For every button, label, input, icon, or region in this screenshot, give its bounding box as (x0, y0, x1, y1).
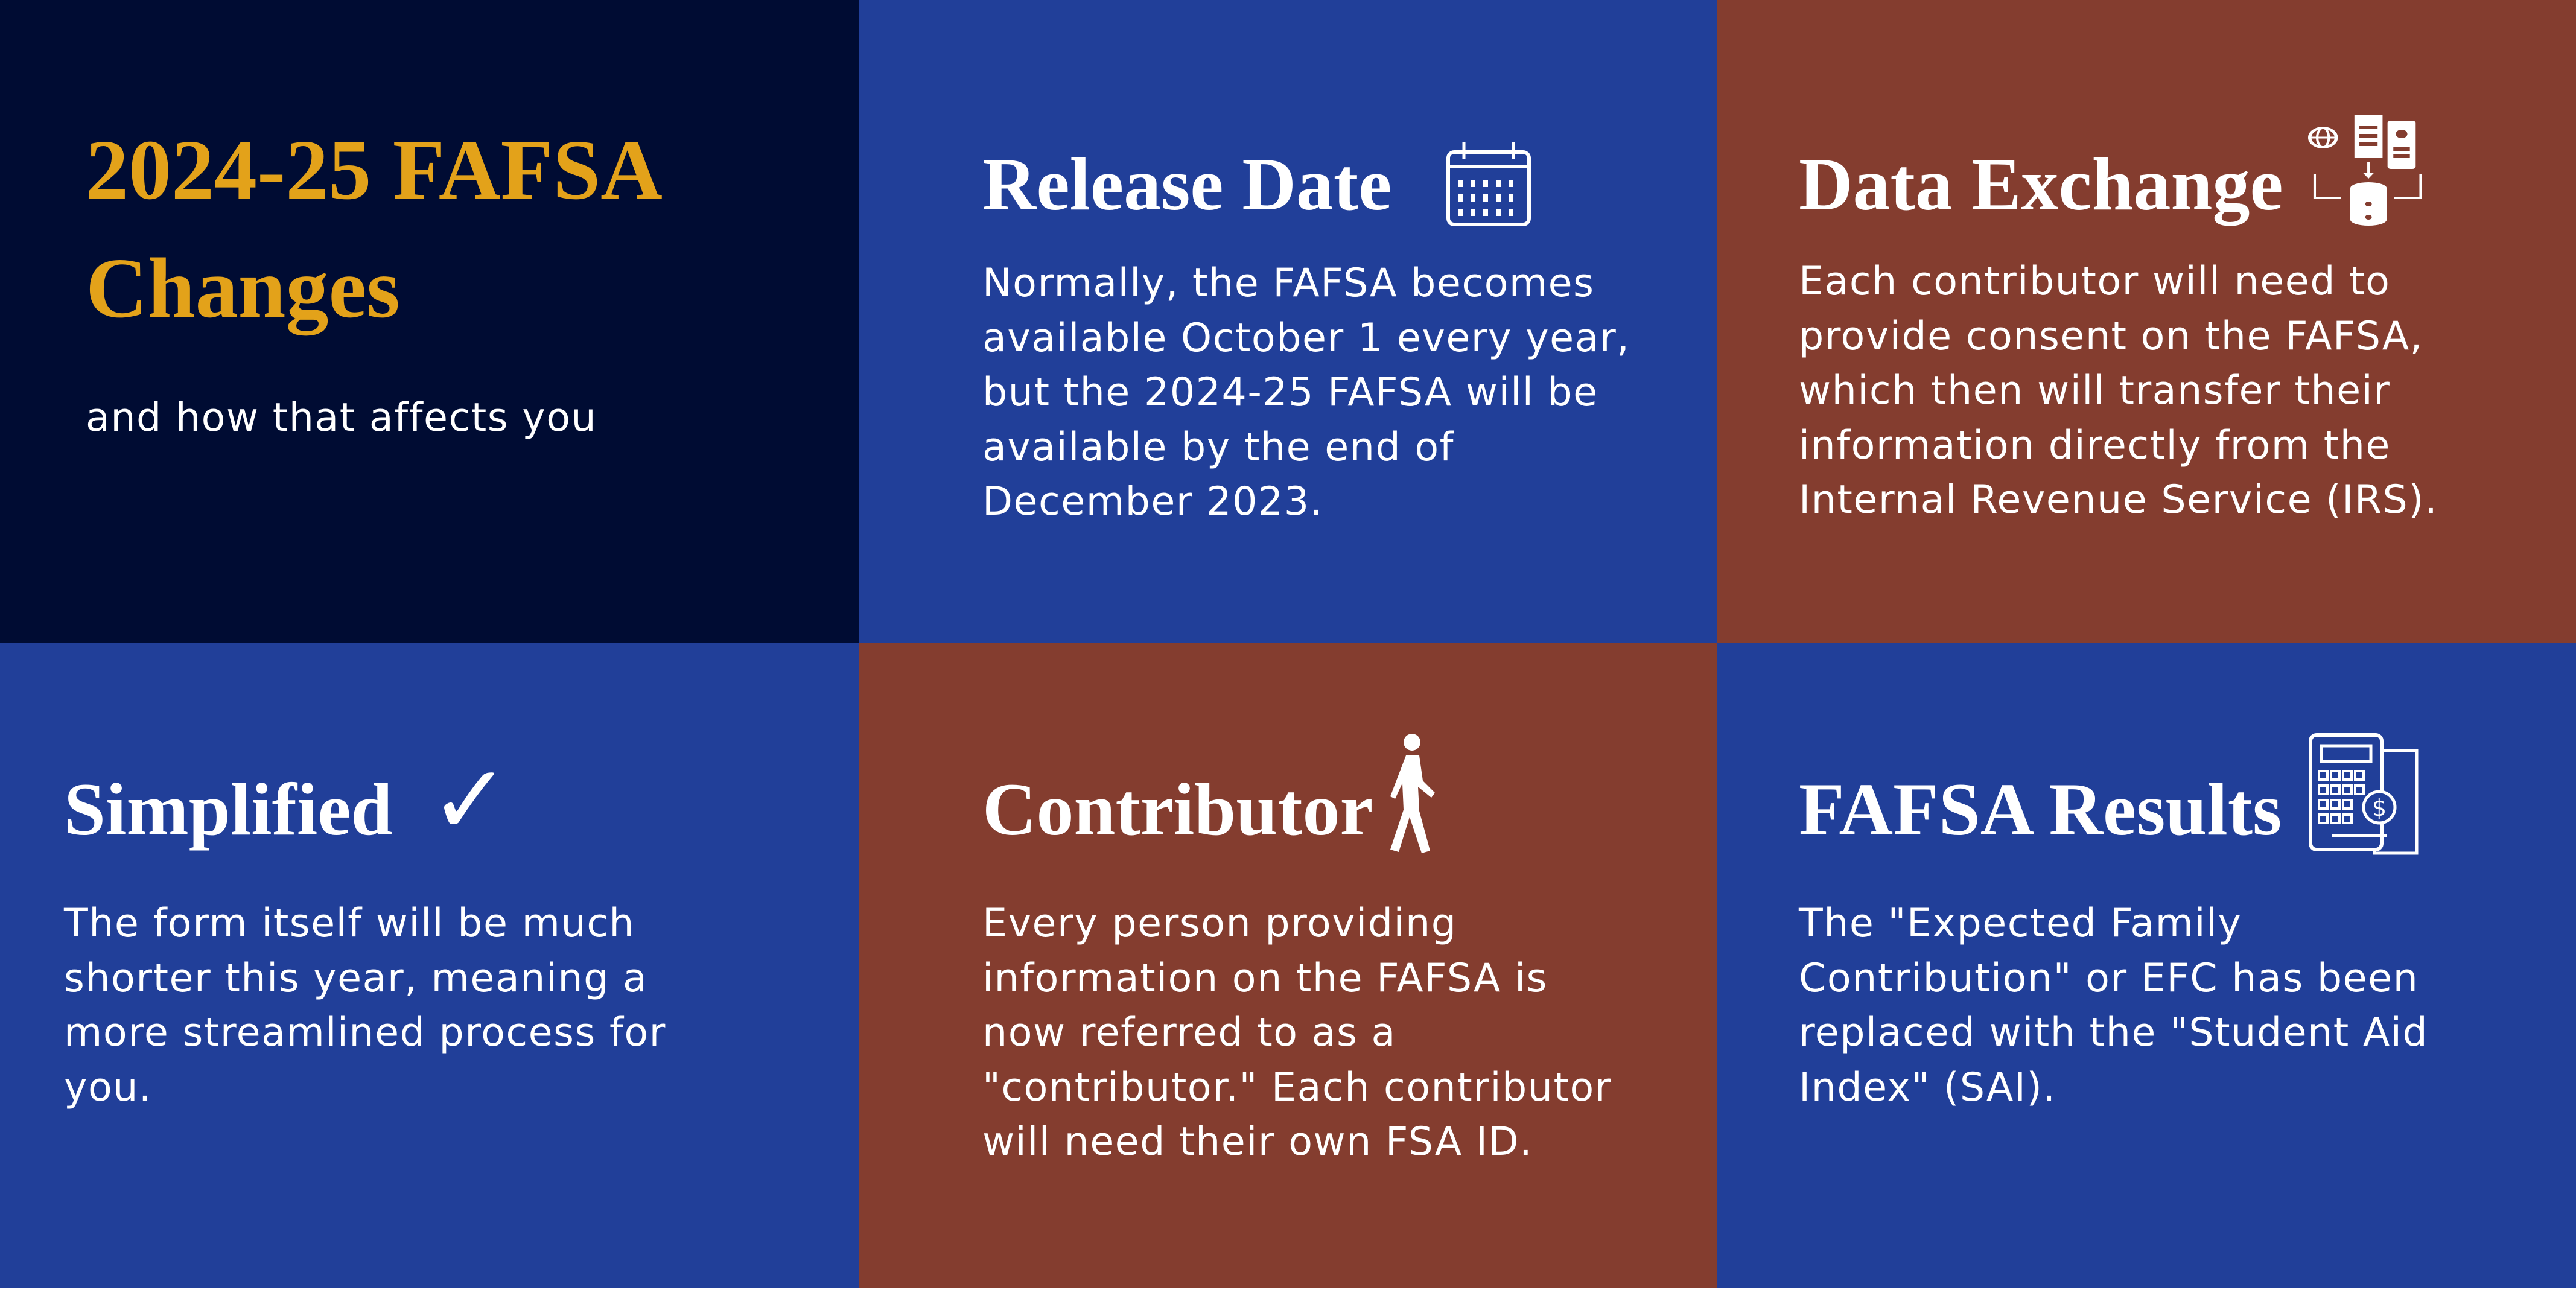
panel: title (0, 0, 859, 643)
text: release date: December 2023. (982, 479, 1323, 524)
icon: check: ✓ (430, 743, 510, 856)
panel: simplified (0, 643, 859, 1288)
text: data exchange: Each contributor will need to (1799, 259, 2390, 304)
text: contributor: "contributor." Each contributor (982, 1064, 1612, 1110)
text: data exchange: Internal Revenue Service (IRS). (1799, 477, 2438, 523)
icon: calculator (2309, 733, 2419, 854)
heading: fafsa results: FAFSA Results (1799, 768, 2282, 851)
text: fafsa results: replaced with the "Student Aid (1799, 1010, 2428, 1055)
text: contributor: now referred to as a (982, 1010, 1396, 1055)
text: fafsa results: Contribution" or EFC has been (1799, 956, 2419, 1000)
heading: contributor: Contributor (982, 768, 1373, 851)
title: 2024-25 FAFSA (86, 122, 663, 217)
text: fafsa results (1798, 901, 2428, 1110)
icon: data exchange (2308, 115, 2422, 226)
text: data exchange (1799, 259, 2438, 523)
text: simplified: The form itself will be much (64, 901, 635, 946)
text: release date: but the 2024-25 FAFSA will be (982, 370, 1598, 415)
text: release date (982, 261, 1630, 524)
subtitle: and how that affects you (86, 395, 597, 440)
icon: calculator: $ (2372, 795, 2387, 821)
text: contributor: information on the FAFSA is (982, 956, 1548, 1000)
text: fafsa results: Index" (SAI). (1799, 1064, 2056, 1110)
text: simplified (64, 901, 666, 1110)
panel: contributor (859, 643, 1717, 1288)
heading: release date: Release Date (982, 143, 1391, 226)
text: simplified: more streamlined process for (64, 1010, 666, 1055)
panel: release date (859, 0, 1717, 643)
icon: walking person (1390, 734, 1435, 853)
text: contributor: Every person providing (982, 901, 1457, 946)
panel: fafsa results (1717, 643, 2576, 1288)
text: data exchange: provide consent on the FAFSA, (1799, 314, 2423, 358)
panel: data exchange (1717, 0, 2576, 643)
heading: simplified: Simplified (64, 768, 392, 851)
text: fafsa results: The "Expected Family (1799, 901, 2242, 946)
text: release date: available October 1 every year, (982, 315, 1630, 361)
icon: calendar (1446, 142, 1531, 226)
text: data exchange: which then will transfer their (1799, 368, 2390, 413)
title: Changes (86, 240, 400, 335)
text: release date: available by the end of (982, 425, 1454, 469)
text: contributor: will need their own FSA ID. (982, 1119, 1533, 1164)
text: simplified: you. (64, 1064, 152, 1110)
text: data exchange: information directly from the (1799, 422, 2391, 468)
text: contributor (982, 901, 1612, 1164)
title (86, 122, 663, 335)
text: release date: Normally, the FAFSA becomes (982, 261, 1595, 306)
text: simplified: shorter this year, meaning a (64, 956, 647, 1000)
heading: data exchange: Data Exchange (1799, 143, 2283, 226)
